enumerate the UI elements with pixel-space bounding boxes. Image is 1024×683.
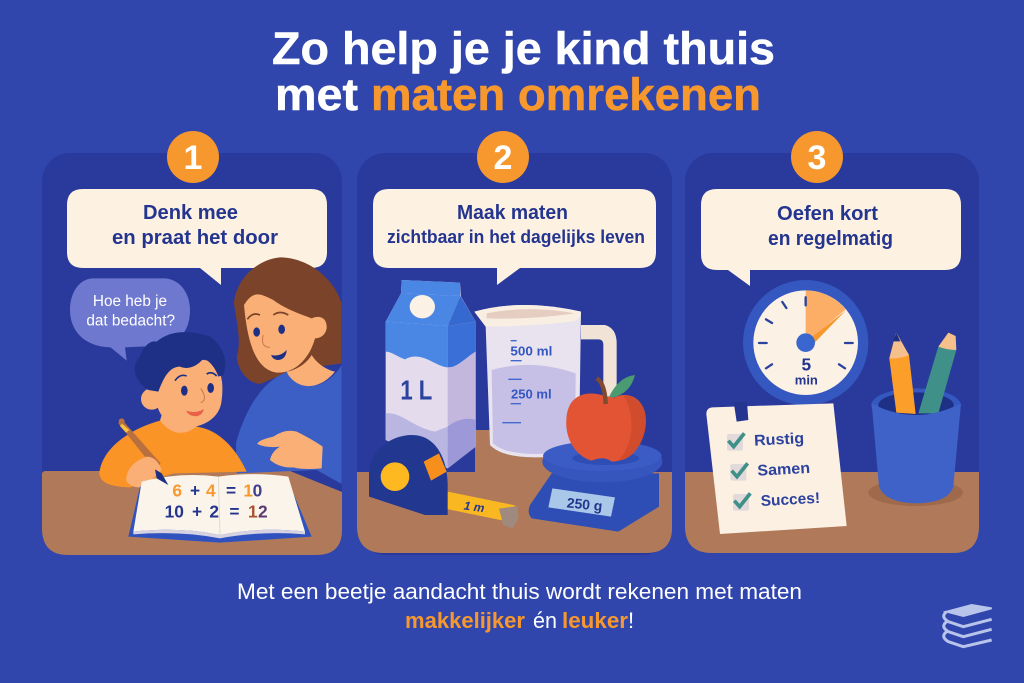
- speech bubble 3: [701, 189, 961, 286]
- speech bubble 2: Maak maten: [457, 202, 568, 224]
- speech bubble 2: [373, 189, 656, 285]
- table 2: [357, 430, 672, 553]
- checklist note: Rustig: [754, 430, 804, 450]
- milk carton: [386, 280, 476, 468]
- kitchen scale: [529, 441, 662, 532]
- measuring jug: 500 ml: [510, 344, 552, 358]
- timer: 5: [802, 355, 812, 375]
- child: [99, 332, 247, 487]
- apple: [566, 375, 646, 462]
- milk carton: 1 L: [400, 374, 432, 405]
- illustration: mother and child: [70, 257, 342, 543]
- open book: 10: [165, 501, 184, 521]
- footer text: én: [533, 608, 557, 633]
- open book: 1: [243, 481, 253, 501]
- open book: 4: [206, 481, 216, 501]
- open book: 2: [209, 501, 219, 521]
- number badge 3: [791, 131, 843, 183]
- speech bubble 3: en regelmatig: [768, 228, 893, 250]
- checklist note: Samen: [757, 460, 810, 480]
- panel: denk mee: [42, 153, 342, 555]
- speech bubble: question: dat bedacht?: [86, 313, 175, 330]
- icon: books logo: [944, 605, 992, 647]
- open book: [128, 469, 312, 543]
- tape measure: 1 m: [463, 498, 486, 515]
- speech bubble 1: Denk mee: [143, 202, 238, 224]
- timer: min: [795, 373, 818, 388]
- title: maten omrekenen: [371, 69, 761, 120]
- footer text: [237, 579, 802, 633]
- number badge 3: 3: [808, 139, 826, 177]
- footer text: makkelijker: [405, 608, 525, 633]
- number badge 2: 2: [494, 139, 512, 177]
- footer text: leuker: [562, 608, 628, 633]
- open book: +: [192, 501, 202, 521]
- footer text: Met een beetje aandacht thuis wordt rekenen met maten: [237, 579, 802, 604]
- number badge 1: 1: [184, 139, 202, 177]
- speech bubble 1: en praat het door: [112, 227, 278, 249]
- timer: [743, 280, 868, 405]
- measuring jug: 250 ml: [511, 388, 552, 402]
- title: met: [275, 69, 358, 120]
- open book: 1: [248, 501, 258, 521]
- title: [272, 23, 775, 120]
- speech bubble 1: [67, 189, 327, 285]
- number badge 2: [477, 131, 529, 183]
- pencil: [118, 419, 161, 469]
- footer text: !: [628, 608, 634, 633]
- speech bubble: question: Hoe heb je: [93, 293, 167, 310]
- table 1: [42, 471, 342, 555]
- open book: 2: [258, 501, 268, 521]
- speech bubble: question: [70, 278, 190, 361]
- open book: 6: [172, 481, 182, 501]
- mother: [234, 257, 342, 484]
- tape measure: [369, 435, 518, 529]
- speech bubble 3: Oefen kort: [777, 203, 878, 225]
- pencil cup: [868, 333, 963, 506]
- open book: =: [229, 501, 239, 521]
- number badge 1: [167, 131, 219, 183]
- checklist note: Succes!: [760, 490, 820, 510]
- checklist note: [706, 402, 847, 534]
- measuring jug: [474, 305, 617, 457]
- mother hand: [257, 431, 323, 469]
- speech bubble 2: zichtbaar in het dagelijks leven: [387, 227, 645, 247]
- kitchen scale: 250 g: [566, 494, 603, 514]
- title: Zo help je je kind thuis: [272, 23, 775, 74]
- panel: maak maten: [357, 153, 672, 555]
- table 3: [685, 472, 979, 553]
- open book: +: [190, 481, 200, 501]
- open book: 0: [253, 481, 262, 501]
- open book: =: [226, 481, 236, 501]
- panel: oefen kort: [685, 153, 979, 553]
